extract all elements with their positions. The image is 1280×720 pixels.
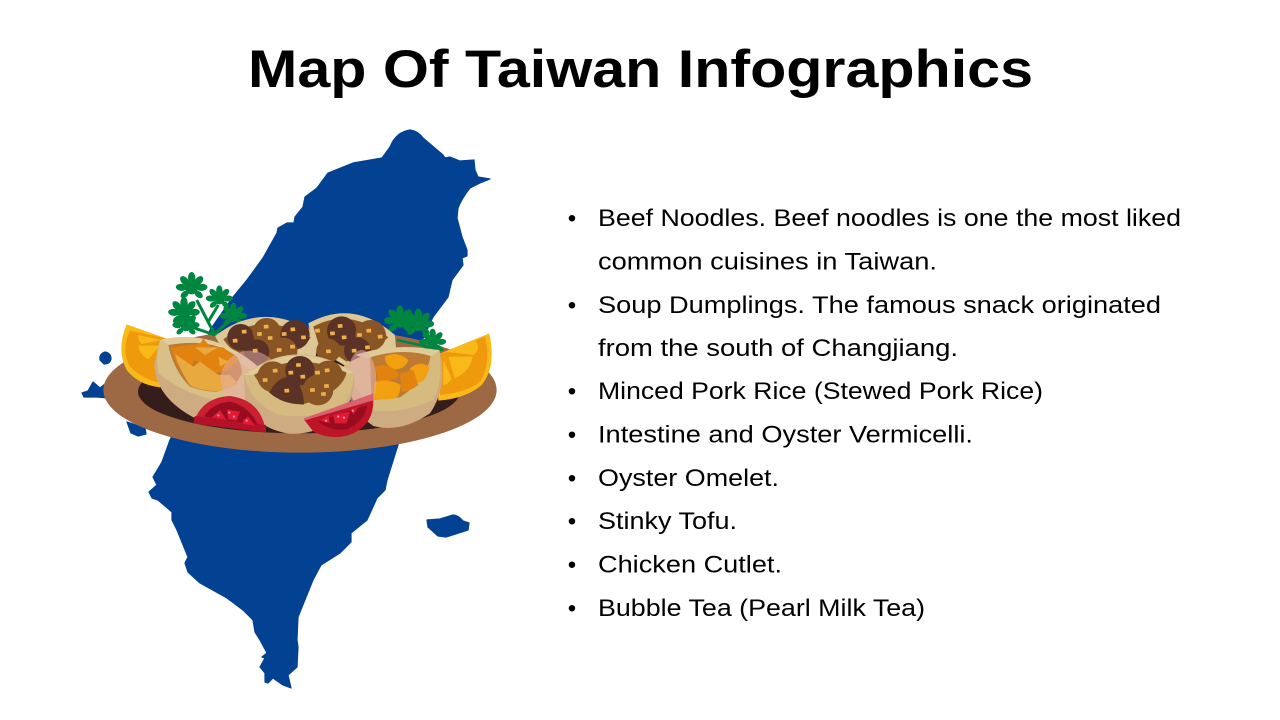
parsley right bbox=[384, 305, 446, 352]
item: intestine and oyster vermicelli: • bbox=[568, 421, 576, 448]
islet: Penghu west bbox=[82, 382, 110, 398]
main island bbox=[149, 130, 490, 688]
right orange wedge bbox=[437, 333, 492, 401]
islet: Orchid Island bbox=[427, 515, 469, 537]
plate well bbox=[138, 350, 460, 433]
item: beef noodles: • bbox=[568, 205, 576, 232]
right dumpling bbox=[343, 347, 442, 428]
item: minced pork rice: Minced Pork Rice (Stewed Pork Rice) bbox=[598, 378, 1043, 405]
item: bubble tea: Bubble Tea (Pearl Milk Tea) bbox=[598, 595, 925, 622]
plate bbox=[103, 327, 497, 453]
item: beef noodles: common cuisines in Taiwan. bbox=[598, 248, 937, 276]
translucent highlight left bbox=[221, 351, 279, 408]
item: beef noodles: Beef Noodles. Beef noodles is one the most liked bbox=[598, 205, 1181, 232]
item: stinky tofu: Stinky Tofu. bbox=[598, 508, 737, 535]
item: chicken cutlet: • bbox=[568, 552, 576, 579]
left dumpling bbox=[154, 337, 258, 417]
item: beef noodles bbox=[568, 205, 1181, 276]
back right dumpling bbox=[308, 313, 396, 367]
title: Map Of Taiwan Infographics bbox=[248, 40, 1033, 99]
parsley left bbox=[168, 272, 247, 336]
right tomato bbox=[304, 393, 373, 437]
item: intestine and oyster vermicelli: Intestine and Oyster Vermicelli. bbox=[598, 421, 973, 448]
islet: Penghu south bbox=[127, 422, 146, 436]
item: soup dumplings: Soup Dumplings. The famous snack originated bbox=[598, 292, 1161, 319]
item: soup dumplings: • bbox=[568, 292, 576, 319]
item: oyster omelet: • bbox=[568, 465, 576, 492]
food list bbox=[568, 205, 1181, 622]
item: stinky tofu: • bbox=[568, 508, 576, 535]
item: soup dumplings bbox=[568, 292, 1161, 362]
left tomato bbox=[193, 396, 266, 433]
translucent highlight right bbox=[347, 350, 376, 411]
map of Taiwan bbox=[82, 130, 490, 688]
plate of food bbox=[103, 272, 497, 453]
islet: Penghu north bbox=[100, 352, 111, 364]
item: oyster omelet: Oyster Omelet. bbox=[598, 465, 779, 492]
item: minced pork rice: • bbox=[568, 378, 576, 405]
item: soup dumplings: from the south of Changjiang. bbox=[598, 335, 958, 362]
back left dumpling bbox=[215, 317, 318, 366]
left orange wedge bbox=[121, 324, 180, 387]
item: bubble tea: • bbox=[568, 595, 576, 622]
item: chicken cutlet: Chicken Cutlet. bbox=[598, 552, 782, 579]
front dumpling bbox=[244, 354, 354, 434]
